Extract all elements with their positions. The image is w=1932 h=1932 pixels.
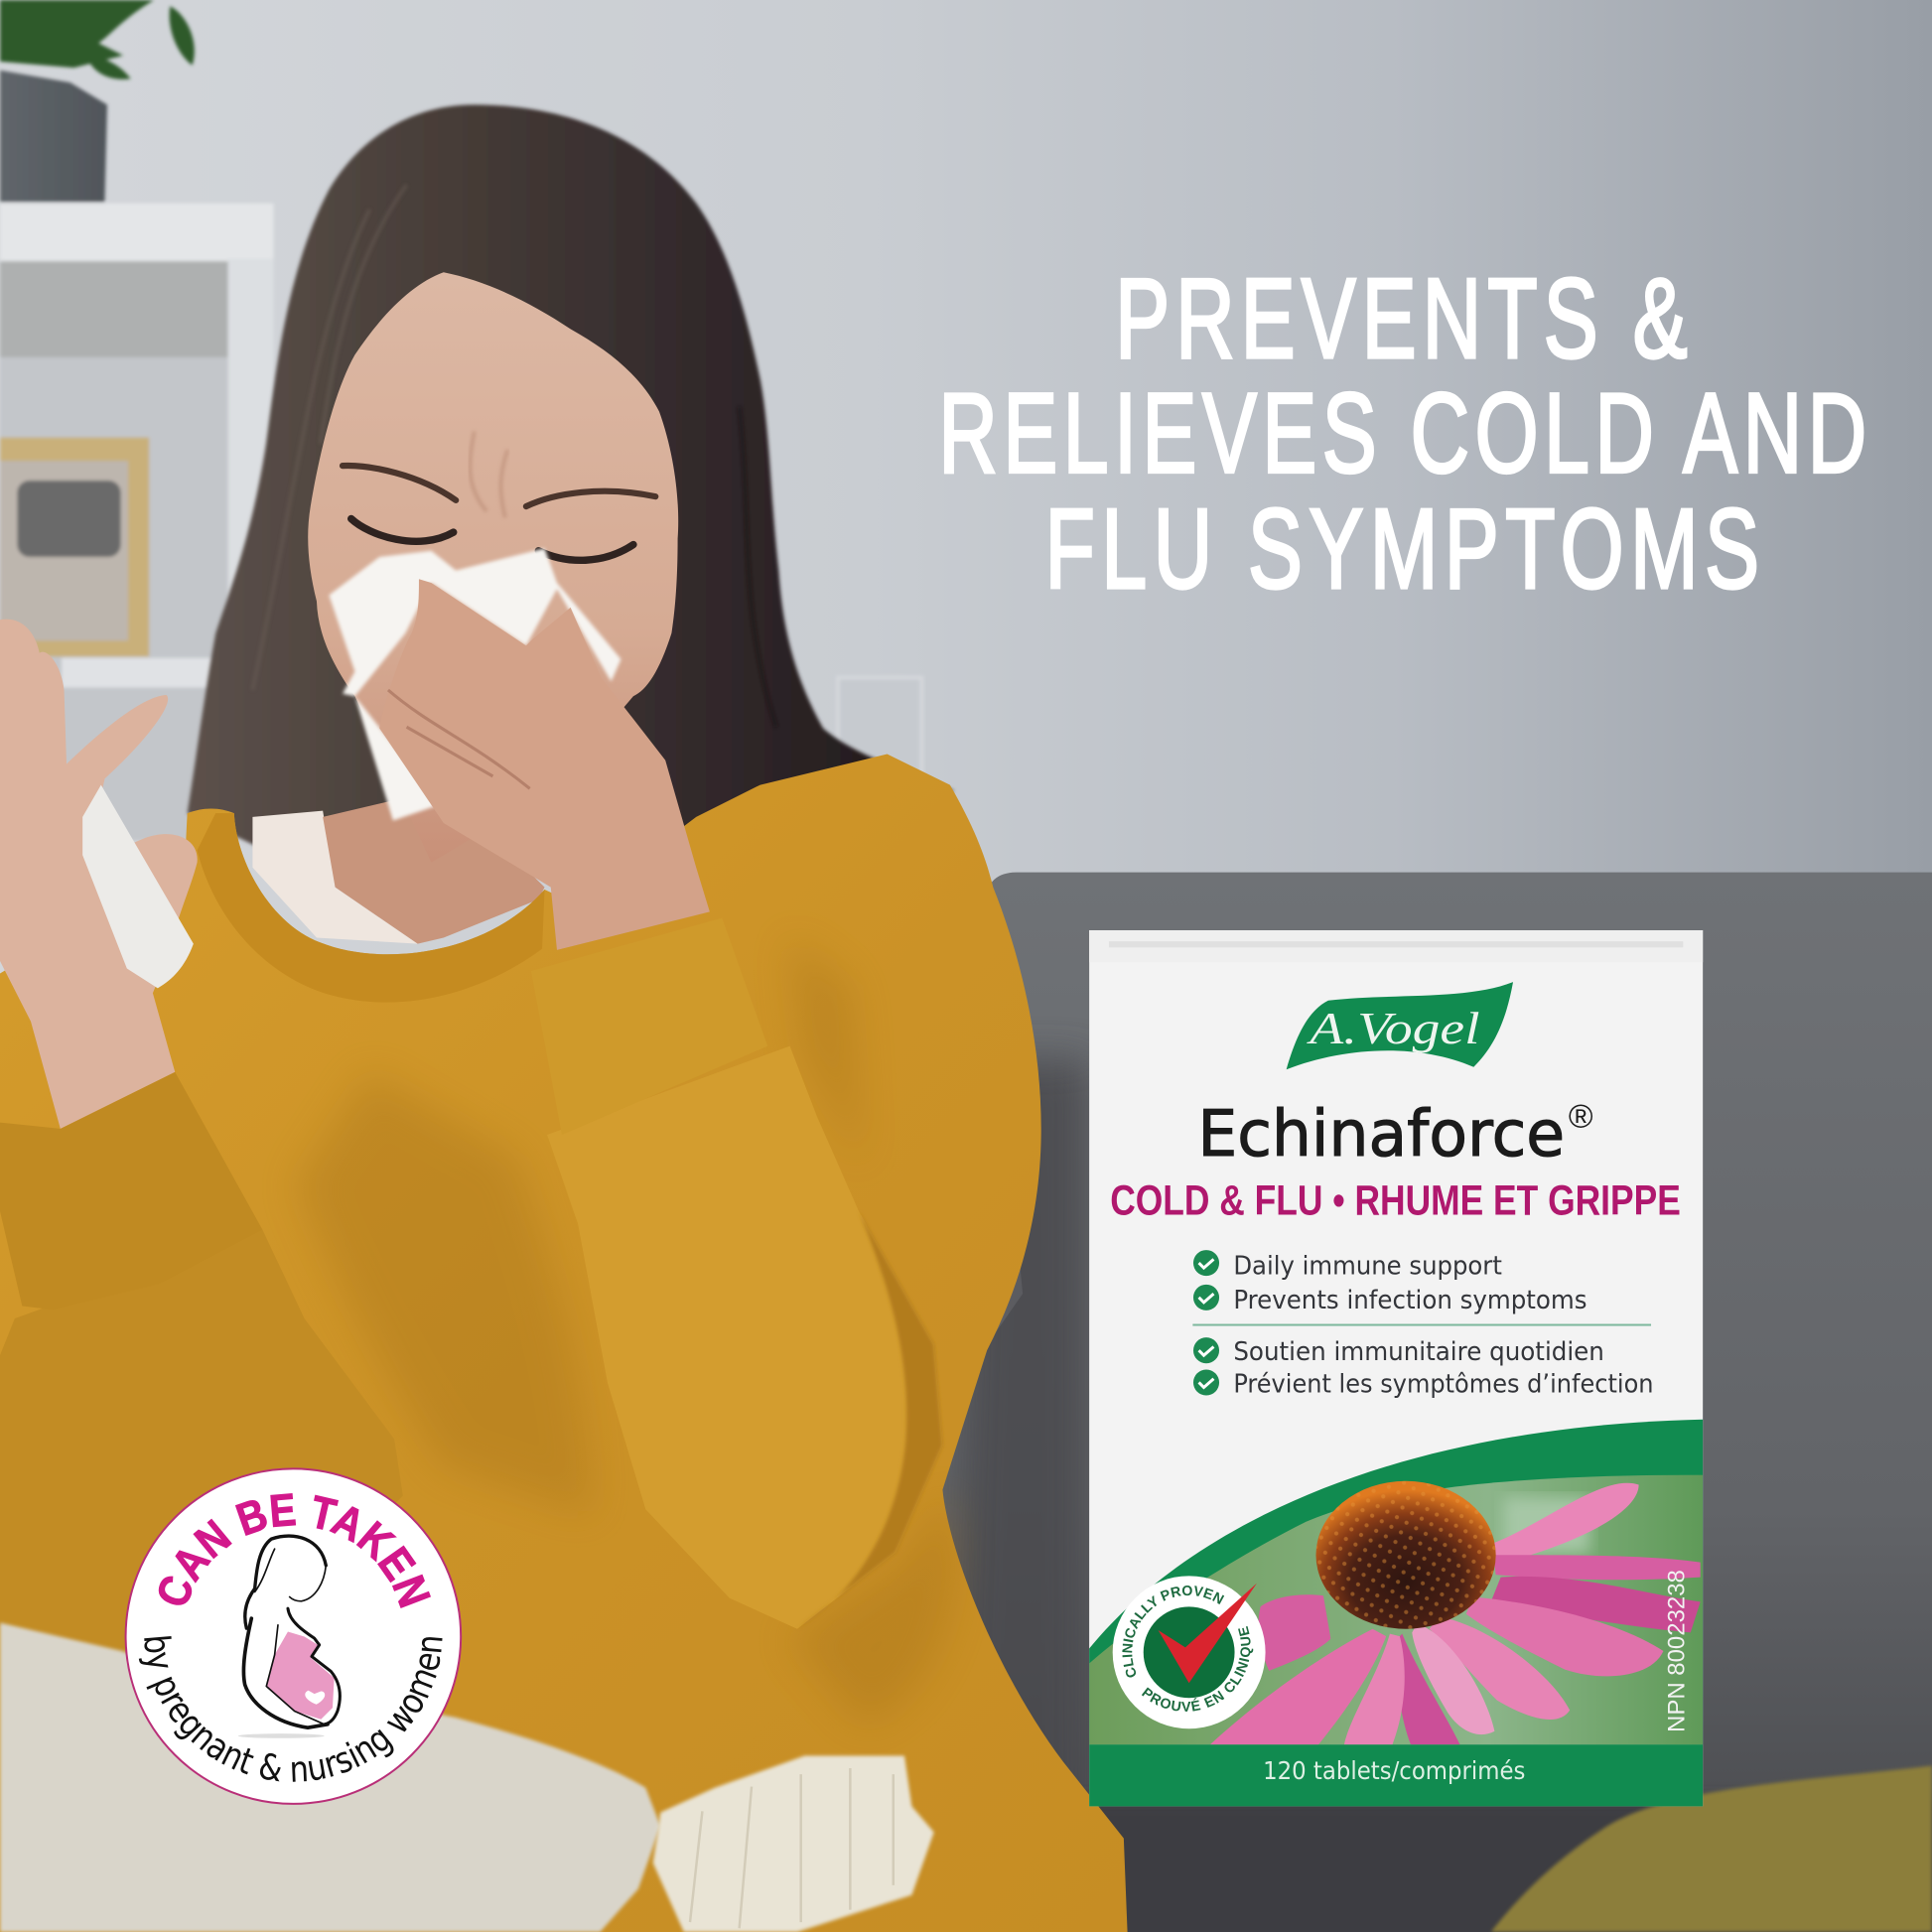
face bbox=[308, 272, 678, 863]
product name: Echinaforce bbox=[1197, 1097, 1565, 1172]
pregnancy badge bbox=[125, 1467, 463, 1805]
curved caption: by pregnant & nursing women bbox=[139, 1636, 443, 1782]
box top flap bbox=[1089, 930, 1703, 962]
petals bbox=[1210, 1483, 1701, 1744]
small picture on wall bbox=[838, 678, 921, 776]
right cuff bbox=[531, 918, 767, 1135]
tassel bbox=[653, 1756, 934, 1932]
pregnant woman icon bbox=[238, 1536, 340, 1738]
pillow bbox=[0, 1622, 660, 1932]
forehead wrinkles bbox=[470, 431, 507, 517]
collar ribbing bbox=[198, 813, 545, 1003]
title: FLU SYMPTOMS bbox=[1045, 486, 1759, 613]
white shirt bbox=[252, 811, 418, 944]
finger lines bbox=[388, 690, 530, 788]
title bbox=[938, 256, 1866, 613]
green swoosh bbox=[1089, 1420, 1703, 1744]
hand at nose bbox=[379, 579, 710, 950]
shelving unit with plant and frame bbox=[0, 0, 274, 840]
right sleeve bbox=[547, 1046, 942, 1629]
check icons bbox=[1193, 1250, 1219, 1396]
title: PREVENTS & bbox=[1115, 256, 1688, 382]
woman bbox=[0, 104, 1128, 1932]
plant pot bbox=[0, 70, 107, 203]
benefit list: Soutien immunitaire quotidien bbox=[1233, 1337, 1604, 1367]
benefit list: Daily immune support bbox=[1233, 1251, 1502, 1281]
sofa bbox=[936, 873, 1932, 1932]
flower photo bbox=[1089, 1466, 1703, 1749]
hair strands bbox=[252, 185, 776, 727]
logo leaf bbox=[1287, 982, 1513, 1069]
tablet count: 120 tablets/comprimés bbox=[1263, 1756, 1525, 1785]
product name: ® bbox=[1569, 1099, 1593, 1136]
clinically proven badge: PROUVÉ EN CLINIQUE bbox=[1142, 1626, 1253, 1712]
tissue bbox=[329, 548, 621, 821]
NPN: NPN 80023238 bbox=[1664, 1570, 1690, 1732]
logo leaf: A.Vogel bbox=[1307, 1003, 1480, 1053]
curved heading: CAN BE TAKEN bbox=[159, 1493, 431, 1608]
subtitle: COLD & FLU • RHUME ET GRIPPE bbox=[1110, 1177, 1681, 1224]
benefit list bbox=[1192, 1250, 1654, 1399]
product box bbox=[1089, 930, 1704, 1807]
green footer band bbox=[1089, 1744, 1703, 1806]
hair back bbox=[188, 104, 955, 863]
raised hand bbox=[0, 620, 198, 1129]
clinically proven badge: CLINICALLY PROVEN bbox=[1122, 1586, 1225, 1678]
seed cone head bbox=[1315, 1481, 1496, 1629]
left sleeve bbox=[0, 1230, 403, 1657]
clinically proven badge bbox=[1112, 1576, 1266, 1729]
sweater body bbox=[0, 755, 1128, 1932]
benefit list: Prevents infection symptoms bbox=[1233, 1286, 1587, 1315]
spray bottle bbox=[82, 785, 194, 988]
neck bbox=[323, 788, 545, 944]
title: RELIEVES COLD AND bbox=[938, 370, 1866, 497]
brows and eyes bbox=[343, 466, 655, 560]
picture frame bbox=[0, 438, 149, 656]
left cuff bbox=[0, 1072, 262, 1310]
red check mark bbox=[1159, 1584, 1257, 1683]
blanket bottom right bbox=[1491, 1765, 1932, 1932]
sweater shading bbox=[296, 936, 956, 1725]
plant leaves bbox=[0, 0, 195, 79]
benefit list: Prévient les symptômes d’infection bbox=[1233, 1369, 1654, 1399]
